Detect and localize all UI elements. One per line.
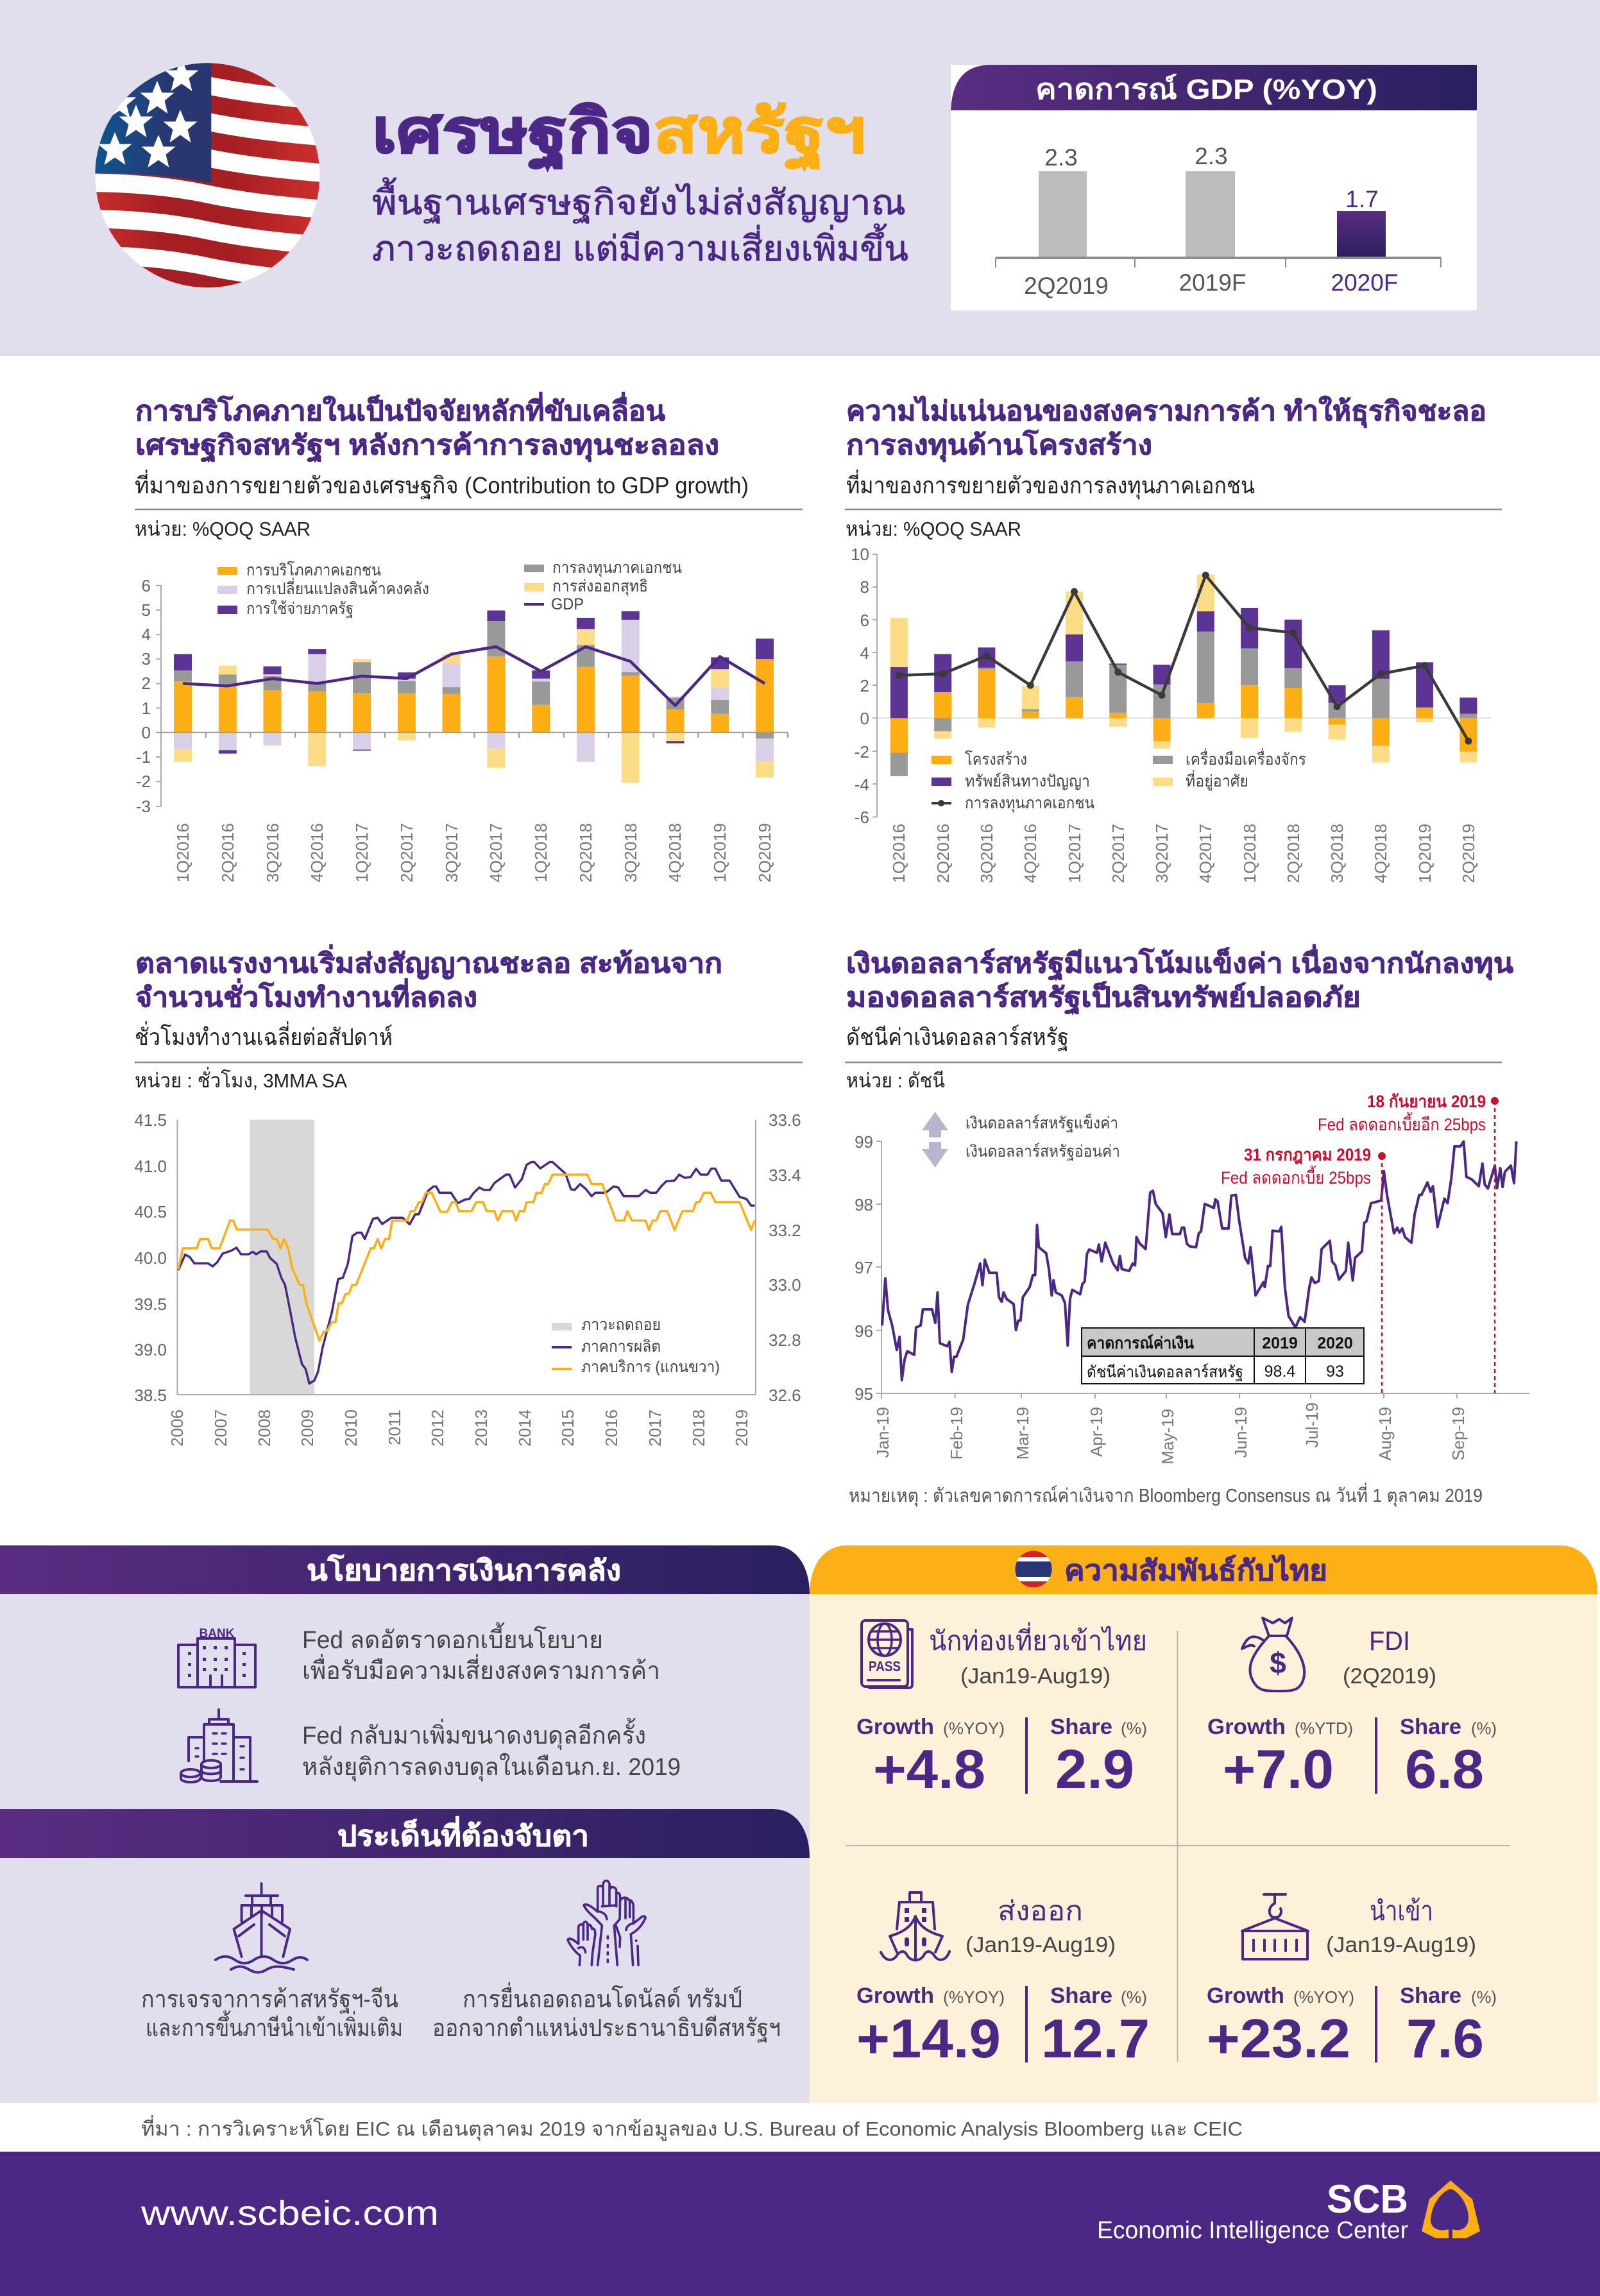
icon: SCB logo xyxy=(1422,2181,1480,2238)
chart 4 x axis labels: Jun-19 xyxy=(1231,1407,1250,1458)
chart 2 y axis labels: 0 xyxy=(860,709,869,728)
FDI stats xyxy=(1207,1715,1497,1800)
imports stats: Growth xyxy=(1207,1984,1284,2008)
icon: US flag circle xyxy=(95,63,319,287)
chart 2 x axis labels: 3Q2016 xyxy=(977,824,996,883)
chart 1 y axis labels: 0 xyxy=(142,723,151,742)
chart 1 x axis labels xyxy=(173,823,774,883)
tourists stats xyxy=(856,1715,1147,1800)
chart 3 right axis labels: 33.6 xyxy=(769,1110,801,1130)
chart 3 heading: จำนวนชั่วโมงทำงานที่ลดลง xyxy=(135,978,477,1012)
chart 2 x axis labels: 1Q2016 xyxy=(889,824,908,883)
chart 3 legend: ภาคการผลิต xyxy=(581,1338,661,1356)
chart 1 y axis labels: -2 xyxy=(136,772,151,791)
chart 2 x axis labels: 1Q2019 xyxy=(1415,824,1434,883)
chart 1 y axis labels: 4 xyxy=(142,625,151,644)
chart 1 x axis labels: 1Q2019 xyxy=(710,823,729,883)
chart 1 x axis labels: 3Q2018 xyxy=(621,823,640,883)
chart 1 x axis labels: 3Q2016 xyxy=(263,823,282,883)
icon: raised hands xyxy=(568,1881,645,1965)
chart 2 heading: ความไม่แน่นอนของสงครามการค้า ทำให้ธุรกิจชะลอ xyxy=(846,395,1486,428)
header band xyxy=(0,0,1600,356)
chart 4 x axis labels: May-19 xyxy=(1158,1409,1177,1465)
footer: Economic Intelligence Center xyxy=(1097,2217,1408,2244)
chart 4 y axis labels: 99 xyxy=(855,1132,873,1152)
chart 2 legend: โครงสร้าง xyxy=(965,750,1027,769)
chart 3 right axis labels: 32.8 xyxy=(769,1331,801,1350)
forecast table: 93 xyxy=(1326,1363,1344,1381)
footer xyxy=(0,2152,1600,2296)
block: exports xyxy=(856,1892,1150,2070)
subtitle xyxy=(372,178,908,268)
chart 2 unit: หน่วย: %QOQ SAAR xyxy=(846,518,1021,540)
GDP bar chart: 2020F xyxy=(1331,269,1398,296)
chart 4 arrows legend: เงินดอลลาร์สหรัฐอ่อนค่า xyxy=(966,1143,1120,1161)
forecast table: 98.4 xyxy=(1264,1363,1295,1381)
chart 2 x axis labels: 2Q2017 xyxy=(1109,824,1128,883)
chart 1 y axis labels: 1 xyxy=(142,699,151,718)
chart 3 x axis labels: 2014 xyxy=(515,1409,534,1447)
policy text: เพื่อรับมือความเสี่ยงสงครามการค้า xyxy=(302,1654,660,1685)
chart 1 x axis labels: 4Q2016 xyxy=(307,823,327,883)
forecast table: คาดการณ์ค่าเงิน xyxy=(1087,1334,1194,1352)
chart 3 left axis labels: 41.5 xyxy=(134,1110,167,1130)
chart 1 x axis labels: 1Q2018 xyxy=(531,823,550,883)
chart 1 heading: การบริโภคภายในเป็นปัจจัยหลักที่ขับเคลื่อน xyxy=(135,392,665,426)
main title: เศรษฐกิจ xyxy=(372,98,653,171)
watch text: ออกจากตำแหน่งประธานาธิบดีสหรัฐฯ xyxy=(432,2015,781,2043)
chart 2 x axis labels: 3Q2017 xyxy=(1152,824,1171,883)
FDI stats: 6.8 xyxy=(1405,1739,1484,1800)
chart 1 x axis labels: 4Q2017 xyxy=(486,823,506,883)
main title: สหรัฐฯ xyxy=(653,98,865,171)
block: tourists: (Jan19-Aug19) xyxy=(960,1664,1111,1688)
Thailand heading xyxy=(810,1545,1597,1594)
source note: ที่มา : การวิเคราะห์โดย EIC ณ เดือนตุลาคม 2019 จากข้อมูลของ U.S. Bureau of Economic Analysis Bloomberg และ CEIC xyxy=(141,2115,1243,2141)
chart 2 x axis labels: 1Q2017 xyxy=(1065,824,1084,883)
watch text xyxy=(141,1982,781,2043)
chart 2 y axis labels: 2 xyxy=(860,676,869,695)
chart 1 x axis labels: 3Q2017 xyxy=(442,823,461,883)
chart 3 right axis labels xyxy=(769,1110,801,1405)
chart 3 x axis labels: 2019 xyxy=(732,1409,751,1447)
forecast table: 2020 xyxy=(1317,1334,1353,1352)
block: tourists: PASS xyxy=(869,1658,901,1674)
chart 4 y axis labels xyxy=(855,1132,873,1404)
FDI stats: Share xyxy=(1400,1715,1461,1739)
block: imports: (Jan19-Aug19) xyxy=(1326,1933,1476,1957)
chart 3 x axis labels: 2015 xyxy=(558,1409,577,1447)
chart 2 x axis labels xyxy=(889,824,1478,883)
imports stats: +23.2 xyxy=(1207,2009,1350,2070)
GDP bar chart: 2.3 xyxy=(1044,144,1078,171)
chart 1 legend: การลงทุนภาคเอกชน xyxy=(552,559,682,577)
chart 1 y axis labels: 3 xyxy=(142,649,151,668)
chart 3 x axis labels: 2008 xyxy=(255,1409,274,1447)
chart 1 GDP line xyxy=(183,647,765,706)
chart 4 heading: มองดอลลาร์สหรัฐเป็นสินทรัพย์ปลอดภัย xyxy=(846,981,1361,1015)
chart 1 y axis labels: -1 xyxy=(136,747,151,767)
chart 3 subtitle: ชั่วโมงทำงานเฉลี่ยต่อสัปดาห์ xyxy=(135,1021,393,1050)
exports title: ส่งออก xyxy=(998,1896,1083,1926)
exports stats: 12.7 xyxy=(1041,2009,1150,2070)
panel: issues to watch xyxy=(0,1809,810,2043)
chart 4 note: หมายเหตุ : ตัวเลขคาดการณ์ค่าเงินจาก Bloomberg Consensus ณ วันที่ 1 ตุลาคม 2019 xyxy=(849,1483,1483,1507)
tourists title: นักท่องเที่ยวเข้าไทย xyxy=(929,1622,1147,1656)
chart 3 left axis labels xyxy=(134,1110,167,1405)
subtitle: พื้นฐานเศรษฐกิจยังไม่ส่งสัญญาณ xyxy=(372,178,906,223)
chart 4 y axis labels: 97 xyxy=(855,1258,873,1277)
FDI title: FDI xyxy=(1369,1626,1410,1656)
imports stats: Share xyxy=(1400,1984,1461,2008)
tourists stats: (%) xyxy=(1121,1719,1147,1738)
tourists stats: +4.8 xyxy=(873,1739,985,1800)
block: tourists xyxy=(856,1620,1147,1800)
chart 4 y axis labels: 96 xyxy=(855,1322,873,1341)
chart 4 x axis labels: Mar-19 xyxy=(1013,1407,1032,1459)
chart 1 subtitle: ที่มาของการขยายตัวของเศรษฐกิจ (Contribution to GDP growth) xyxy=(135,470,749,500)
panel: chart 4 dollar index xyxy=(845,944,1529,1507)
GDP bar chart xyxy=(996,143,1441,299)
block: FDI: (2Q2019) xyxy=(1343,1664,1436,1688)
chart 2 x axis labels: 2Q2018 xyxy=(1284,824,1303,883)
chart 2 heading: การลงทุนด้านโครงสร้าง xyxy=(846,429,1152,462)
chart 2 x axis labels: 1Q2018 xyxy=(1240,824,1259,883)
chart 4 arrows legend: เงินดอลลาร์สหรัฐแข็งค่า xyxy=(966,1113,1118,1132)
forecast table xyxy=(1082,1328,1364,1384)
block: imports xyxy=(1207,1894,1497,2070)
chart 2 x axis labels: 4Q2018 xyxy=(1371,824,1390,883)
chart 3 x axis labels xyxy=(167,1409,751,1447)
chart 3 heading: ตลาดแรงงานเริ่มส่งสัญญาณชะลอ สะท้อนจาก xyxy=(135,944,722,980)
chart 1 x axis labels: 2Q2016 xyxy=(218,823,237,883)
chart 1 x axis labels: 2Q2019 xyxy=(755,823,774,883)
chart 4 x axis labels xyxy=(873,1402,1468,1465)
chart 4 x axis labels: Aug-19 xyxy=(1375,1407,1395,1461)
chart 1 heading: เศรษฐกิจสหรัฐฯ หลังการค้าการลงทุนชะลอลง xyxy=(135,430,719,463)
panel: issues to watch: ประเด็นที่ต้องจับตา xyxy=(337,1816,589,1852)
block: FDI: $ xyxy=(1270,1646,1286,1679)
Fed rate cut markers: Fed ลดดอกเบี้ย 25bps xyxy=(1221,1165,1371,1187)
chart 3 right axis labels: 33.2 xyxy=(769,1221,801,1240)
chart 3 left axis labels: 41.0 xyxy=(134,1157,167,1176)
chart 1 x axis labels: 2Q2017 xyxy=(397,823,416,883)
chart 2 y axis labels: -6 xyxy=(855,808,869,827)
chart 4 heading: เงินดอลลาร์สหรัฐมีแนวโน้มแข็งค่า เนื่องจากนักลงทุน xyxy=(846,944,1513,981)
panel: GDP forecast: คาดการณ์ GDP (%YOY) xyxy=(1035,73,1377,105)
chart 3 unit: หน่วย : ชั่วโมง, 3MMA SA xyxy=(135,1067,347,1092)
Fed rate cut markers xyxy=(1221,1092,1499,1393)
exports stats xyxy=(856,1984,1150,2070)
chart 1 legend: การส่งออกสุทธิ xyxy=(552,577,648,596)
chart 2 x axis labels: 3Q2018 xyxy=(1327,824,1347,883)
chart 3 left axis labels: 39.5 xyxy=(134,1295,167,1314)
chart 2 y axis labels: 6 xyxy=(860,611,869,630)
chart 2 y axis labels: 10 xyxy=(851,545,869,564)
chart 3 lines xyxy=(178,1162,754,1384)
Fed rate cut markers: 31 กรกฎาคม 2019 xyxy=(1244,1145,1371,1164)
icon: passport xyxy=(862,1620,912,1688)
FDI stats: Growth xyxy=(1207,1715,1286,1739)
GDP bar chart: 2.3 xyxy=(1195,143,1228,169)
FDI stats: (%YTD) xyxy=(1295,1719,1353,1738)
chart 3 left axis labels: 40.0 xyxy=(134,1248,167,1268)
chart 3 x axis labels: 2016 xyxy=(602,1409,621,1447)
chart 1 legend: การใช้จ่ายภาครัฐ xyxy=(246,599,353,618)
exports stats: Growth xyxy=(856,1984,934,2008)
chart 4 x axis labels: Feb-19 xyxy=(947,1407,966,1459)
panel: chart 1 private consumption xyxy=(135,392,803,883)
tourists stats: 2.9 xyxy=(1055,1739,1134,1800)
block: FDI xyxy=(1207,1618,1497,1800)
chart 4 arrows legend xyxy=(922,1112,1120,1168)
panel: chart 3 labour market xyxy=(134,944,803,1447)
chart 2 investment line xyxy=(896,572,1472,745)
Fed rate cut markers: Fed ลดดอกเบี้ยอีก 25bps xyxy=(1318,1112,1486,1134)
policy heading xyxy=(0,1545,810,1594)
chart 3 heading xyxy=(135,944,722,1012)
chart 2 y axis labels xyxy=(851,545,869,827)
icon: bank xyxy=(178,1627,255,1687)
chart 4 x axis labels: Jan-19 xyxy=(873,1407,892,1458)
watch text: การยื่นถอดถอนโดนัลด์ ทรัมป์ xyxy=(463,1982,742,2013)
watch text: และการขึ้นภาษีนำเข้าเพิ่มเติม xyxy=(146,2010,403,2042)
chart 3 right axis labels: 32.6 xyxy=(769,1386,801,1405)
forecast table: ดัชนีค่าเงินดอลลาร์สหรัฐ xyxy=(1087,1363,1243,1381)
panel: fiscal and monetary policy: นโยบายการเงินการคลัง xyxy=(307,1553,621,1586)
chart 4 x axis labels: Sep-19 xyxy=(1449,1407,1468,1461)
GDP bar chart: 1.7 xyxy=(1345,186,1379,212)
chart 4 dollar index line xyxy=(882,1141,1517,1380)
panel: fiscal and monetary policy xyxy=(0,1545,810,2103)
policy text: หลังยุติการลดงบดุลในเดือนก.ย. 2019 xyxy=(302,1753,681,1782)
chart 1 y axis labels: 6 xyxy=(142,576,151,595)
chart 4 heading xyxy=(846,944,1513,1015)
chart 3 x axis labels: 2017 xyxy=(645,1409,665,1447)
chart 3 legend xyxy=(552,1316,720,1376)
chart 3 x axis labels: 2006 xyxy=(167,1409,187,1447)
GDP bar chart: 2Q2019 xyxy=(1024,273,1109,299)
chart 3 x axis labels: 2018 xyxy=(689,1409,708,1447)
watch text: การเจรจาการค้าสหรัฐฯ-จีน xyxy=(141,1986,398,2014)
imports stats: (%YOY) xyxy=(1293,1987,1354,2007)
chart 3 x axis labels: 2013 xyxy=(472,1409,491,1447)
chart 2 subtitle: ที่มาของการขยายตัวของการลงทุนภาคเอกชน xyxy=(846,470,1255,500)
chart 3 x axis labels: 2007 xyxy=(211,1409,230,1447)
SCB wordmark: SCB xyxy=(1327,2177,1408,2222)
exports stats: +14.9 xyxy=(856,2009,1001,2070)
chart 1 legend: การบริโภคภาคเอกชน xyxy=(246,561,381,579)
chart 1 x axis labels: 4Q2018 xyxy=(665,823,685,883)
exports stats: Share xyxy=(1050,1984,1112,2008)
icon: cargo ship xyxy=(881,1892,949,1960)
icon: Thai flag xyxy=(1014,1551,1053,1588)
FDI stats: +7.0 xyxy=(1223,1739,1334,1800)
exports stats: (%) xyxy=(1121,1987,1147,2007)
chart 2 legend: การลงทุนภาคเอกชน xyxy=(965,794,1094,813)
chart 2 stacked bars xyxy=(890,574,1477,776)
forecast table: 2019 xyxy=(1262,1334,1298,1352)
panel: chart 2 private investment xyxy=(845,395,1502,883)
imports stats: (%) xyxy=(1471,1987,1497,2007)
GDP bar chart: 2019F xyxy=(1179,269,1246,296)
tourists stats: Growth xyxy=(856,1715,934,1739)
chart 2 heading xyxy=(846,395,1486,462)
panel: GDP forecast xyxy=(951,65,1477,310)
chart 3 x axis labels: 2010 xyxy=(341,1409,361,1447)
website: www.scbeic.com xyxy=(140,2194,439,2232)
panel: relationship with Thailand xyxy=(810,1545,1597,2103)
tourists stats: Share xyxy=(1050,1715,1112,1739)
imports stats xyxy=(1207,1984,1497,2070)
chart 3 left axis labels: 39.0 xyxy=(134,1340,167,1359)
chart 1 x axis labels: 2Q2018 xyxy=(576,823,595,883)
chart 1 y axis labels: -3 xyxy=(136,797,151,816)
chart 3 legend: ภาวะถดถอย xyxy=(581,1316,661,1334)
icon: bank: BANK xyxy=(200,1627,235,1640)
chart 1 legend: GDP xyxy=(551,595,584,613)
imports title: นำเข้า xyxy=(1370,1896,1433,1926)
chart 1 x axis labels: 1Q2017 xyxy=(352,823,371,883)
chart 1 y axis labels xyxy=(136,576,151,816)
chart 3 right axis labels: 33.0 xyxy=(769,1275,801,1295)
policy text: Fed ลดอัตราดอกเบี้ยนโยบาย xyxy=(302,1622,603,1654)
chart 2 y axis labels: 8 xyxy=(860,577,869,597)
chart 2 x axis labels: 2Q2016 xyxy=(933,824,953,883)
chart 3 legend: ภาคบริการ (แกนขวา) xyxy=(581,1358,720,1376)
exports stats: (%YOY) xyxy=(943,1987,1005,2007)
block: exports: (Jan19-Aug19) xyxy=(966,1933,1116,1957)
chart 3 x axis labels: 2011 xyxy=(385,1409,404,1445)
chart 2 y axis labels: -4 xyxy=(855,775,869,794)
chart 3 left axis labels: 38.5 xyxy=(134,1386,167,1405)
chart 4 x axis labels: Apr-19 xyxy=(1087,1407,1106,1457)
chart 2 x axis labels: 4Q2016 xyxy=(1021,824,1040,883)
chart 3 left axis labels: 40.5 xyxy=(134,1202,167,1221)
GDP panel heading xyxy=(951,65,1477,110)
imports stats: 7.6 xyxy=(1406,2009,1484,2070)
chart 2 legend xyxy=(932,748,1306,813)
chart 1 legend: การเปลี่ยนแปลงสินค้าคงคลัง xyxy=(246,577,429,598)
chart 2 x axis labels: 2Q2019 xyxy=(1459,824,1478,883)
chart 4 y axis labels: 95 xyxy=(855,1384,873,1404)
icon: container and hook xyxy=(1242,1894,1308,1959)
icon: money bag xyxy=(1242,1618,1304,1691)
icon: tower and coins xyxy=(181,1710,257,1782)
subtitle: ภาวะถดถอย แต่มีความเสี่ยงเพิ่มขึ้น xyxy=(372,224,908,268)
chart 4 unit: หน่วย : ดัชนี xyxy=(846,1069,945,1092)
watch heading xyxy=(0,1809,810,1858)
chart 2 x axis labels: 4Q2017 xyxy=(1196,824,1215,883)
chart 2 y axis labels: -2 xyxy=(855,742,869,761)
chart 3 x axis labels: 2009 xyxy=(298,1409,317,1447)
chart 1 x axis labels: 1Q2016 xyxy=(173,823,192,883)
chart 2 legend: เครื่องมือเครื่องจักร xyxy=(1186,748,1306,769)
chart 4 y axis labels: 98 xyxy=(855,1195,873,1214)
panel: relationship with Thailand: ความสัมพันธ์กับไทย xyxy=(1064,1554,1327,1586)
chart 1 unit: หน่วย: %QOQ SAAR xyxy=(135,518,311,540)
chart 4 subtitle: ดัชนีค่าเงินดอลลาร์สหรัฐ xyxy=(846,1024,1069,1051)
recession band xyxy=(250,1119,314,1395)
Fed rate cut markers: 18 กันยายน 2019 xyxy=(1367,1092,1486,1111)
FDI stats: (%) xyxy=(1471,1719,1497,1738)
main title xyxy=(372,98,865,171)
policy text: Fed กลับมาเพิ่มขนาดงบดุลอีกครั้ง xyxy=(302,1717,646,1750)
icon: container ship xyxy=(216,1884,307,1972)
chart 3 right axis labels: 33.4 xyxy=(769,1166,801,1185)
chart 4 x axis labels: Jul-19 xyxy=(1302,1402,1322,1448)
chart 1 legend xyxy=(217,559,682,618)
chart 1 heading xyxy=(135,392,719,463)
chart 2 legend: ทรัพย์สินทางปัญญา xyxy=(965,772,1090,790)
chart 1 y axis labels: 2 xyxy=(142,674,151,693)
chart 2 legend: ที่อยู่อาศัย xyxy=(1186,770,1248,791)
chart 3 x axis labels: 2012 xyxy=(428,1409,447,1447)
tourists stats: (%YOY) xyxy=(943,1719,1005,1738)
chart 1 y axis labels: 5 xyxy=(142,600,151,620)
policy text xyxy=(302,1622,681,1782)
chart 2 y axis labels: 4 xyxy=(860,643,869,663)
chart 1 stacked bars xyxy=(174,611,774,783)
